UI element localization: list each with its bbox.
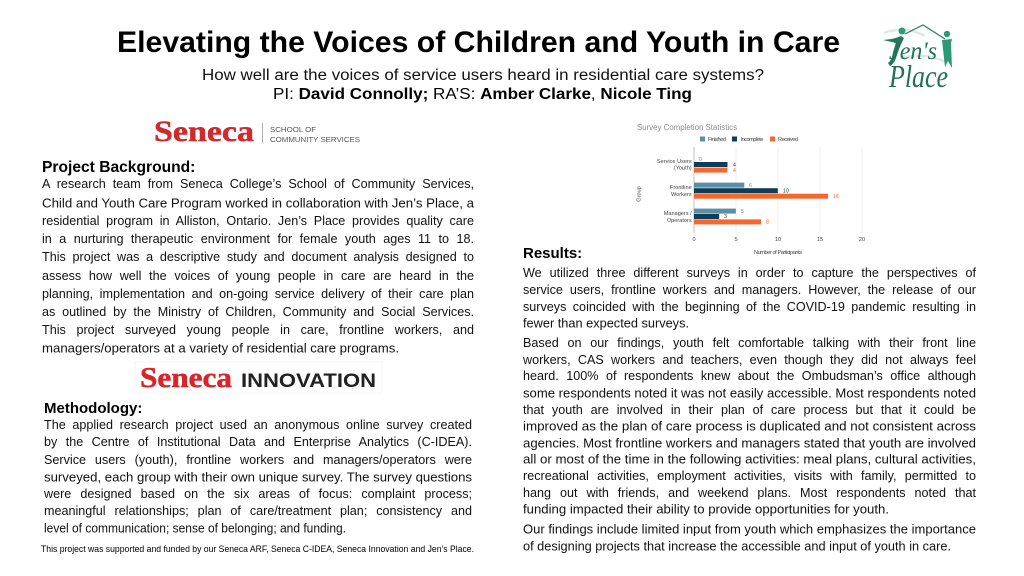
text block: project background: This project was a descriptive study and document analysis designed to <box>42 250 474 264</box>
logo: Jen's Place <box>883 25 952 94</box>
subtitle: research question: How well are the voices of service users heard in residential care systems? <box>202 67 764 84</box>
category labels: Managers / <box>664 211 692 217</box>
title: Elevating the Voices of Children and Youth in Care <box>117 26 840 59</box>
text block: project background: as outlined by the Ministry of Children, Community and Social Services. <box>42 305 474 319</box>
heading: results: Results: <box>523 245 582 262</box>
x-axis title: Number of Participants <box>754 250 802 256</box>
x-axis tick labels: 0 <box>692 237 696 243</box>
text block: results paragraph 2: recreational activities, employment activities, visits with family, permitted to <box>523 469 976 483</box>
chart gridlines <box>736 147 862 233</box>
chart legend <box>700 136 798 143</box>
text block: results paragraph 2: workers, CAS workers and teachers, even though they did not always feel <box>523 352 976 366</box>
text block: results paragraph 1: surveys coincided with the beginning of the COVID-19 pandemic resulting in <box>523 300 976 314</box>
text block: results paragraph 2 <box>523 336 976 516</box>
text block: results paragraph 3: Our findings include limited input from youth which emphasizes the importance <box>523 522 976 536</box>
text block: results paragraph 3: of designing projects that increase the accessible and input of youth in care. <box>523 539 951 553</box>
bars: frontline workers: 16 <box>833 194 839 200</box>
category labels: Operators <box>667 218 692 224</box>
text block: project background: planning, implementation and on-going service delivery of their care plan <box>42 287 474 301</box>
logo: Seneca School of Community Services: Seneca <box>154 115 254 148</box>
y-axis title: Group <box>636 186 642 202</box>
bars: frontline workers: 6 <box>749 183 752 189</box>
chart legend: Received <box>778 137 798 143</box>
text block: project background: This project surveyed young people in care, frontline workers, and <box>42 323 474 337</box>
text block: results paragraph 1: service users, frontline workers and managers. However, the release of our <box>523 283 976 297</box>
category labels: (Youth) <box>674 166 692 172</box>
chart title: Survey Completion Statistics <box>637 123 737 132</box>
bars: frontline workers: 10 <box>783 189 789 195</box>
bars: managers and operators: 5 <box>741 209 744 215</box>
bars: frontline workers <box>694 183 839 200</box>
bars: managers and operators <box>694 209 769 226</box>
bars: service users: 4 <box>733 162 736 168</box>
text block: results paragraph 2: improved as the plan of care process is duplicated and not consistent across <box>523 419 976 433</box>
text block: methodology: level of communication; sense of belonging; and funding. <box>44 521 346 535</box>
text block: project background: in a nurturing therapeutic environment for female youth ages 11 to 18. <box>42 232 474 246</box>
bars: service users: 0 <box>699 157 702 163</box>
bars: service users <box>694 157 736 174</box>
text block: methodology: The applied research project used an anonymous online survey created <box>44 418 472 432</box>
text block: results paragraph 2: some respondents noted it was not easily accessible. Most respondents noted <box>523 386 976 400</box>
logo: Seneca School of Community Services: COMMUNITY SERVICES <box>270 135 360 144</box>
text block: methodology: Service users (youth), frontline workers and managers/operators were <box>44 453 472 467</box>
text block: results paragraph 1 <box>523 266 976 330</box>
bars: service users: 4 <box>733 168 736 174</box>
x-axis tick labels: 15 <box>817 237 823 243</box>
text block: project background: Child and Youth Care Program worked in collaboration with Jen’s Place, a <box>42 196 474 210</box>
logo: Seneca Innovation <box>135 362 382 394</box>
text block: results paragraph 2: that youth are involved in their plan of care process but that it could be <box>523 403 976 417</box>
text block: project background: A research team from Seneca College’s School of Community Services, <box>42 177 474 191</box>
text block: project background <box>42 177 474 355</box>
category labels: Frontline <box>670 185 692 191</box>
text block: methodology <box>44 418 472 535</box>
text block: results paragraph 2: Based on our findings, youth felt comfortable talking with their front line <box>523 336 976 350</box>
text block: results paragraph 1: We utilized three different surveys in order to capture the perspectives of <box>523 266 976 280</box>
x-axis tick labels: 10 <box>775 237 781 243</box>
text block: results paragraph 1: fewer than expected surveys. <box>523 316 689 330</box>
text block: project background: residential program in Alliston, Ontario. Jen’s Place provides quality care <box>42 214 474 228</box>
x-axis tick labels <box>692 237 865 243</box>
logo: Seneca School of Community Services: SCHOOL OF <box>270 125 316 134</box>
text block: results paragraph 2: hang out with friends, and weekend plans. Most respondents noted that <box>523 486 976 500</box>
text block: methodology: meaningful relationships; plan of care/treatment plan; consistency and <box>44 504 472 518</box>
logo: Seneca Innovation: INNOVATION <box>241 370 376 392</box>
logo: Jen's Place: Place <box>888 58 948 94</box>
heading: project background: Project Background: <box>42 159 195 176</box>
footer: funding acknowledgement: This project was supported and funded by our Seneca ARF, Seneca C-IDEA, Seneca Innovation and Jen’s Place. <box>41 544 474 555</box>
text block: results paragraph 3 <box>523 522 976 553</box>
panel: methodology <box>44 400 472 535</box>
x-axis tick labels: 5 <box>734 237 738 243</box>
category labels: Service Users <box>657 159 692 165</box>
logo: Jen's Place: Jen's <box>889 38 937 65</box>
panel: project background <box>42 159 474 355</box>
text block: results paragraph 2: heard. 100% of respondents knew about the Ombudsman’s office although <box>523 369 976 383</box>
logo: Seneca School of Community Services <box>154 115 360 148</box>
x-axis tick labels: 20 <box>859 237 865 243</box>
panel: results <box>523 245 976 553</box>
category labels <box>657 159 692 224</box>
chart legend: Finished <box>708 137 726 143</box>
bars: managers and operators: 8 <box>766 220 769 226</box>
text block: project background: assess how well the voices of young people in care are heard in the <box>42 269 474 283</box>
text block: methodology: surveyed, each group with their own unique survey. The survey questions <box>44 470 472 484</box>
investigators line: PI: David Connolly; RA’S: Amber Clarke , Nicole Ting <box>273 86 692 103</box>
logo: Seneca Innovation: Seneca <box>140 363 232 394</box>
text block: methodology: by the Centre of Institutional Data and Enterprise Analytics (C-IDEA). <box>44 435 472 449</box>
text block: results paragraph 2: funding impacted their ability to provide opportunities for youth. <box>523 502 889 516</box>
text block: results paragraph 2: all or most of the time in the following activities: meal plans, cultural activities, <box>523 452 976 466</box>
category labels: Workers <box>671 192 692 198</box>
text block: project background: managers/operators at a variety of residential care programs. <box>42 341 399 355</box>
bars: managers and operators: 3 <box>724 214 727 220</box>
text block: methodology: were designed based on the six areas of focus: complaint process; <box>44 487 472 501</box>
chart legend: Incomplete <box>740 137 764 143</box>
text block: results paragraph 2: agencies. Most frontline workers and managers stated that youth are involved <box>523 436 976 450</box>
heading: methodology: Methodology: <box>44 400 142 417</box>
bar chart: survey completion statistics <box>636 123 865 256</box>
